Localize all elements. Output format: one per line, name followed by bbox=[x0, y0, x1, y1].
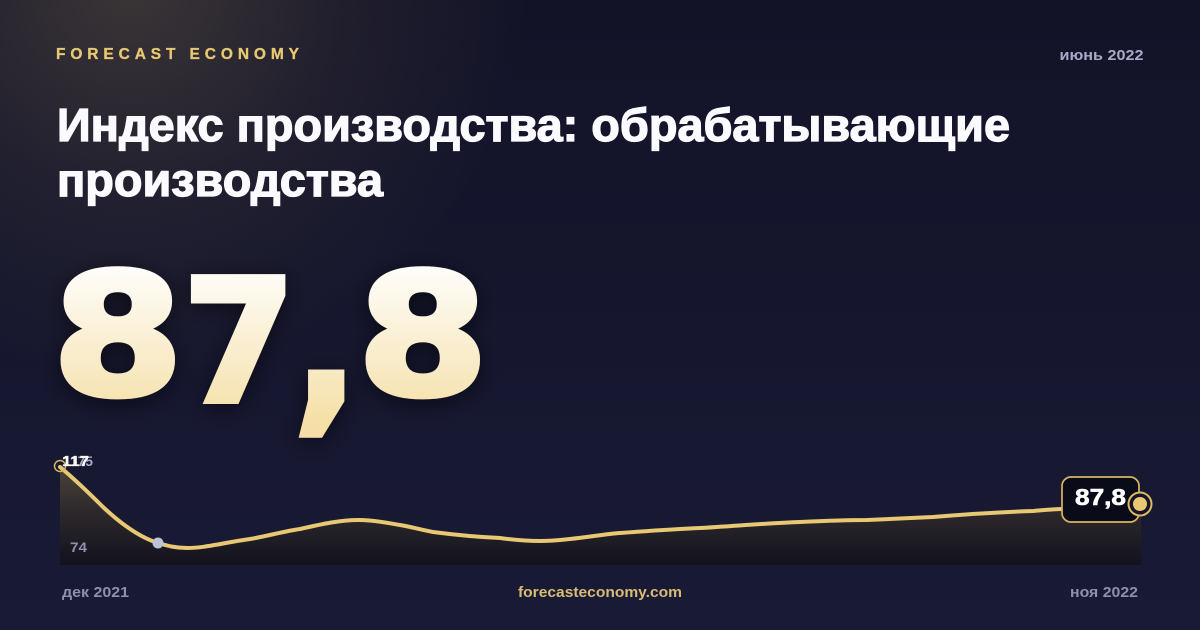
title: производства bbox=[57, 154, 384, 206]
max label: 1175 bbox=[63, 453, 93, 469]
chart area fill bbox=[60, 467, 1141, 565]
end value callout bbox=[1062, 477, 1139, 522]
end value callout: 87,8 bbox=[1075, 484, 1126, 510]
brand label: FORECAST ECONOMY bbox=[56, 46, 300, 63]
website label: forecasteconomy.com bbox=[518, 584, 682, 601]
start date label: дек 2021 bbox=[62, 584, 129, 601]
big value: 8 bbox=[357, 239, 488, 435]
title bbox=[57, 99, 1010, 206]
end marker bbox=[1128, 492, 1152, 516]
date label: июнь 2022 bbox=[1060, 47, 1144, 64]
big value bbox=[52, 233, 488, 453]
big value: , bbox=[293, 233, 359, 453]
start marker bbox=[54, 460, 66, 472]
min marker bbox=[152, 538, 164, 548]
start value label: 117 bbox=[62, 453, 89, 470]
title: Индекс производства: обрабатывающие bbox=[57, 99, 1010, 151]
big value: 8 bbox=[52, 239, 183, 435]
sparkline chart bbox=[54, 453, 1152, 565]
end date label: ноя 2022 bbox=[1070, 584, 1138, 601]
big value: 7 bbox=[183, 244, 295, 442]
min label: 74 bbox=[70, 540, 88, 555]
chart line bbox=[60, 467, 1062, 548]
